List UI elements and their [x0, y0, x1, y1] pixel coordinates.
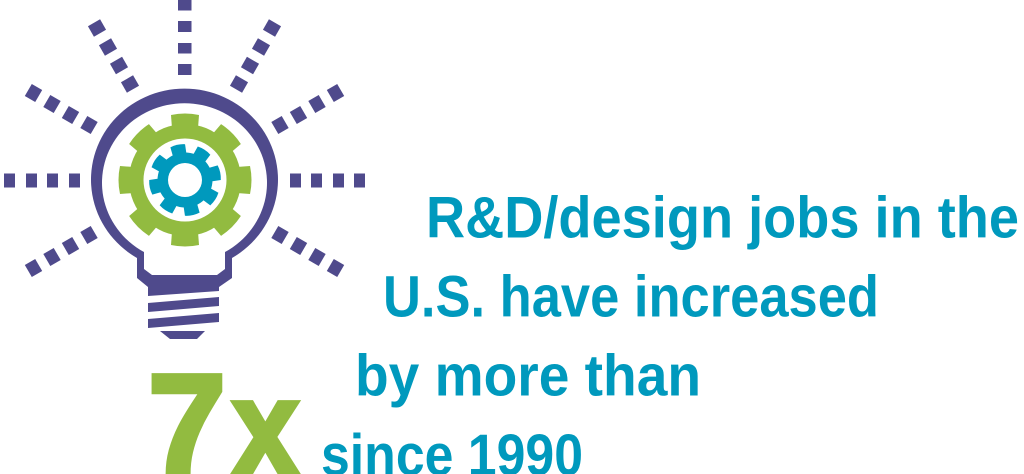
line 2: U.S. have increased [383, 264, 879, 330]
green gear [118, 114, 252, 246]
icon: light bulb with gears [4, 0, 365, 339]
line 3: by more than [355, 344, 701, 408]
blue gear [148, 143, 222, 217]
bulb outline and screw base [91, 89, 278, 339]
statement text [321, 186, 1019, 474]
rays of light [4, 0, 365, 277]
big number: 7x [148, 346, 299, 474]
